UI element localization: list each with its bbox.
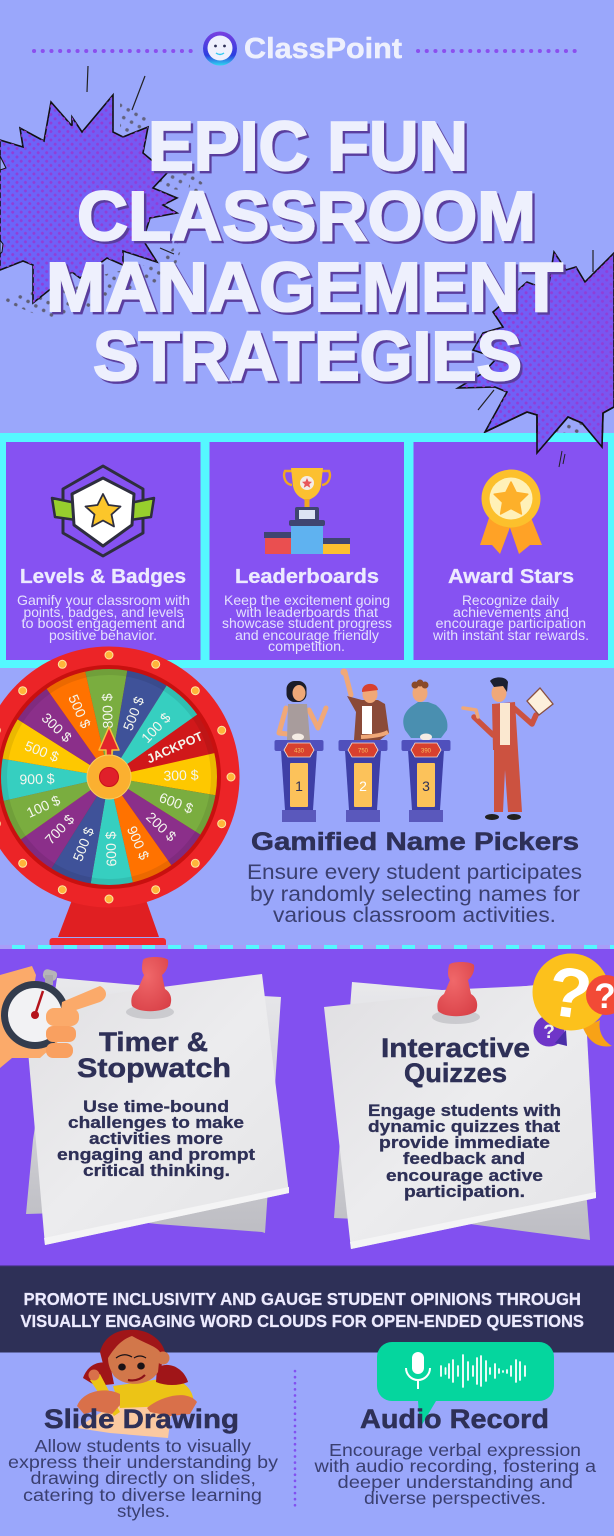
card: Award Stars [414, 442, 608, 660]
wheel segments: 900 $ [19, 770, 55, 787]
wheel hub and pointer [87, 727, 131, 799]
contestant 1 [279, 681, 326, 740]
card: Leaderboards: showcase student progress [222, 615, 392, 631]
title: EPIC FUN [148, 107, 468, 185]
text block: name pickers description [247, 860, 582, 927]
sticky note: Interactive Quizzes: Engage students with [368, 1101, 561, 1120]
text block: Audio Record description [313, 1440, 596, 1508]
burst tips overlapping the cyan band and card [485, 407, 614, 467]
card: Levels & Badges: positive behavior. [49, 627, 157, 643]
comic burst: right [458, 250, 614, 453]
cyan band behind feature cards [0, 433, 614, 668]
podium 3 [402, 740, 450, 822]
podium 1: 1 [295, 778, 303, 794]
podium 3: 390 [421, 748, 432, 754]
sticky note: Timer & Stopwatch: Use time-bound [83, 1097, 229, 1116]
wheel segments: 200 $ [143, 809, 180, 845]
wheel segments: 500 $ [120, 694, 147, 733]
icon: trophy on podium [264, 468, 350, 554]
title: CLASSROOM [77, 177, 536, 255]
wheel stand [50, 900, 166, 947]
host with clipboard [463, 677, 553, 820]
heading: Gamified Name Pickers: Gamified Name Pickers [251, 828, 579, 856]
sticky note: Interactive Quizzes: dynamic quizzes that [368, 1117, 560, 1136]
card: Award Stars: with instant star rewards. [432, 627, 589, 643]
purple section background [0, 949, 614, 1266]
wheel segments: 600 $ [102, 831, 119, 867]
text block: Slide Drawing description: Allow students to visually [34, 1436, 251, 1456]
text block: Slide Drawing description: catering to diverse learning [23, 1485, 262, 1505]
sticky note: Timer & Stopwatch [24, 957, 289, 1245]
wheel segments: 500 $ [23, 737, 61, 765]
text block: Audio Record description: Encourage verbal expression [329, 1440, 581, 1460]
banner: word clouds: PROMOTE INCLUSIVITY AND GAUGE STUDENT OPINIONS THROUGH [24, 1289, 581, 1309]
banner: word clouds [0, 1265, 614, 1352]
card: Leaderboards: Keep the excitement going [224, 592, 390, 608]
wheel segments: 300 $ [163, 767, 199, 784]
contestants and host illustration [274, 668, 553, 822]
wheel segments: 300 $ [39, 710, 75, 745]
sticky note: Timer & Stopwatch: Timer & [99, 1027, 208, 1057]
wheel rim bulbs [0, 651, 235, 903]
card: Levels & Badges [6, 442, 200, 660]
sticky note: Interactive Quizzes: encourage active [386, 1166, 543, 1185]
text block: Slide Drawing description: express their understanding by [8, 1452, 278, 1472]
wheel segments: 700 $ [42, 811, 77, 847]
title: STRATEGIES [93, 317, 522, 395]
icon: girl drawing [77, 1330, 197, 1438]
header: ClassPoint logo [34, 32, 576, 66]
text block: Audio Record description: with audio recording, fostering a [313, 1456, 596, 1476]
podium 1: 430 [294, 748, 305, 754]
sticky note: Interactive Quizzes: provide immediate [379, 1133, 550, 1152]
icon: question bubbles [532, 951, 614, 1046]
card: Award Stars: achievements and [453, 604, 569, 620]
sticky note: Interactive Quizzes: feedback and [403, 1149, 525, 1168]
card: Levels & Badges: to boost engagement and [22, 615, 185, 631]
card: Leaderboards: competition. [268, 638, 345, 654]
podium 2: 750 [358, 748, 369, 754]
card: Leaderboards [210, 442, 404, 660]
wheel segments: 100 $ [24, 792, 63, 821]
prize wheel [0, 646, 240, 947]
contestant 3 [403, 680, 447, 740]
card: Leaderboards: Leaderboards [235, 566, 379, 588]
banner: word clouds: VISUALLY ENGAGING WORD CLOUDS FOR OPEN-ENDED QUESTIONS [20, 1311, 584, 1331]
podium 3: 3 [422, 778, 430, 794]
icon: shield badge [52, 466, 154, 556]
dashed divider [0, 945, 614, 949]
heading: Slide Drawing: Slide Drawing [44, 1404, 239, 1434]
sticky note: Interactive Quizzes [324, 962, 596, 1249]
vertical dotted divider [294, 1371, 296, 1510]
text block: Audio Record description: diverse perspectives. [364, 1488, 546, 1508]
text block: Slide Drawing description: styles. [117, 1501, 170, 1521]
icon: medal with star [480, 470, 542, 554]
wheel segments: 500 $ [69, 825, 97, 863]
card: Levels & Badges: Levels & Badges [20, 566, 186, 588]
card: Award Stars: encourage participation [436, 615, 586, 631]
wheel segments: 100 $ [138, 709, 174, 746]
icon: audio message bubble [377, 1342, 554, 1428]
sticky note: Timer & Stopwatch: critical thinking. [83, 1161, 230, 1180]
text block: name pickers description: by randomly selecting names for [250, 882, 580, 906]
sticky note: Interactive Quizzes: Interactive [381, 1033, 530, 1063]
card: Levels & Badges: Gamify your classroom with [17, 592, 190, 608]
card: Leaderboards: and encourage friendly [235, 627, 379, 643]
text block: Audio Record description: deeper understanding and [338, 1472, 573, 1492]
card: Award Stars: Award Stars [448, 566, 574, 588]
text block: name pickers description: various classroom activities. [273, 903, 556, 927]
wheel segments: 900 $ [124, 824, 153, 862]
text block: Slide Drawing description: drawing directly on slides, [30, 1468, 256, 1488]
wheel segments: 600 $ [157, 789, 196, 817]
sticky note: Timer & Stopwatch: challenges to make [68, 1113, 244, 1132]
sticky note: Interactive Quizzes: participation. [404, 1182, 525, 1201]
card: Leaderboards: with leaderboards that [235, 604, 378, 620]
sticky note: Timer & Stopwatch: Stopwatch [77, 1053, 231, 1083]
sticky note: Interactive Quizzes: Quizzes [404, 1058, 507, 1088]
podium 2: 2 [359, 778, 367, 794]
card: Levels & Badges: points, badges, and levels [24, 604, 184, 620]
heading: Audio Record: Audio Record [360, 1404, 549, 1434]
wheel segments [1, 669, 217, 885]
card: Award Stars: Recognize daily [462, 592, 559, 608]
icon: push pin [437, 962, 477, 1016]
contestant 2 [340, 668, 389, 740]
wheel segments: 800 $ [99, 693, 116, 729]
title: MANAGEMENT [46, 248, 563, 326]
wheel segments: JACKPOT [145, 729, 205, 766]
icon: question bubbles: ? [543, 1022, 555, 1043]
comic burst: left [0, 66, 205, 320]
icon: hand holding stopwatch [0, 966, 106, 1068]
icon: push pin [131, 957, 171, 1011]
icon: question bubbles: ? [543, 951, 596, 1035]
wheel segments: 500 $ [65, 692, 94, 731]
text block: name pickers description: Ensure every student participates [247, 860, 582, 884]
title [46, 107, 563, 395]
podium 2 [338, 740, 388, 822]
podium 1 [274, 740, 324, 822]
text block: Slide Drawing description [8, 1436, 278, 1521]
sticky note: Timer & Stopwatch: engaging and prompt [57, 1145, 255, 1164]
header: ClassPoint logo: ClassPoint [244, 33, 402, 65]
sticky note: Timer & Stopwatch: activities more [89, 1129, 223, 1148]
